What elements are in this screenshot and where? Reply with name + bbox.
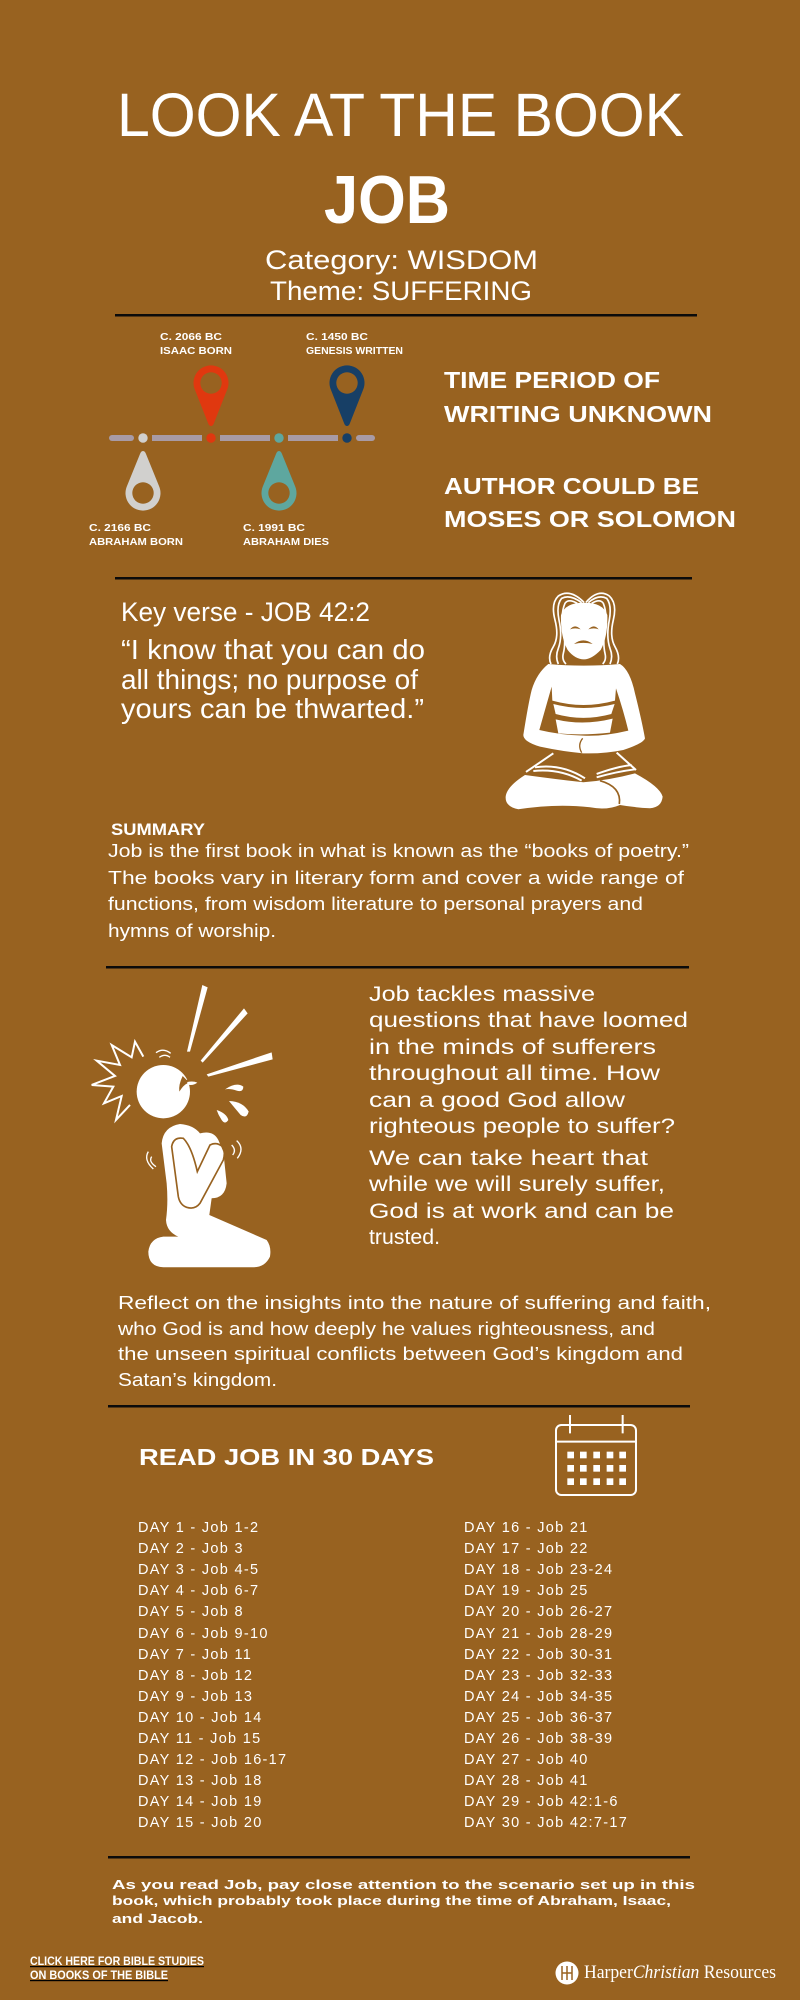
link: Bible studies [30, 1954, 204, 1982]
title: LOOK AT THE BOOK [117, 81, 684, 149]
timeline bar [109, 435, 375, 441]
reading plan: days 1 to 15: DAY 10 - Job 14 [138, 1710, 263, 1726]
reading plan: days 16 to 30: DAY 24 - Job 34-35 [464, 1689, 613, 1705]
label: Isaac born [160, 332, 232, 357]
verse text: all things; no purpose of [121, 664, 418, 695]
label: Abraham born [89, 523, 183, 548]
panel: reflection text: the unseen spiritual conflicts between God’s kingdom and [118, 1344, 683, 1364]
reading plan: days 1 to 15: DAY 4 - Job 6-7 [138, 1583, 259, 1599]
panel: massive questions text: righteous people to suffer? [369, 1115, 675, 1138]
panel: massive questions text: Job tackles massive [369, 983, 595, 1006]
marker: Genesis written [330, 365, 365, 443]
label: Abraham born: C. 2166 BC [89, 523, 151, 534]
panel: massive questions text: can a good God allow [369, 1089, 626, 1112]
icon: calendar [556, 1415, 636, 1495]
title block [117, 81, 684, 306]
panel: reflection text: Reflect on the insights into the nature of suffering and faith, [118, 1293, 711, 1313]
reading plan heading: READ JOB IN 30 DAYS [139, 1444, 434, 1470]
label: Abraham dies: C. 1991 BC [243, 523, 305, 534]
label: Abraham dies: ABRAHAM DIES [243, 537, 329, 548]
reading plan: days 16 to 30: DAY 28 - Job 41 [464, 1773, 589, 1789]
verse reference: Key verse - JOB 42:2 [121, 597, 370, 627]
panel: timeline [89, 332, 403, 548]
panel: summary [108, 820, 689, 941]
reading plan: days 16 to 30: DAY 22 - Job 30-31 [464, 1647, 613, 1663]
panel: massive questions text [368, 983, 688, 1249]
reading plan: days 1 to 15: DAY 5 - Job 8 [138, 1604, 244, 1620]
reading plan: days 1 to 15: DAY 15 - Job 20 [138, 1815, 263, 1831]
panel: time period and author: AUTHOR COULD BE [444, 473, 699, 499]
summary text: The books vary in literary form and cover a wide range of [108, 868, 685, 888]
panel: time period and author [444, 367, 736, 532]
panel: massive questions text: while we will surely suffer, [368, 1173, 665, 1196]
summary text [108, 841, 689, 941]
reading plan: days 16 to 30: DAY 23 - Job 32-33 [464, 1668, 613, 1684]
panel: massive questions text: questions that have loomed [369, 1009, 688, 1032]
panel: massive questions text: God is at work and can be [369, 1200, 674, 1223]
reading plan: days 1 to 15: DAY 12 - Job 16-17 [138, 1752, 287, 1768]
label: Genesis written: GENESIS WRITTEN [306, 346, 403, 357]
reading plan: days 16 to 30: DAY 21 - Job 28-29 [464, 1626, 613, 1642]
reading plan: days 16 to 30: DAY 30 - Job 42:7-17 [464, 1815, 628, 1831]
label: Genesis written: C. 1450 BC [306, 332, 368, 343]
icon: suffering figure crying out [92, 985, 273, 1267]
logo: HarperChristian Resources: HarperChristian Resources [584, 1962, 776, 1983]
reading plan: days 1 to 15: DAY 3 - Job 4-5 [138, 1562, 259, 1578]
theme: Theme: SUFFERING [270, 276, 532, 306]
marker: Abraham born [126, 433, 160, 511]
reading plan: days 16 to 30: DAY 17 - Job 22 [464, 1541, 589, 1557]
panel: massive questions text: We can take heart that [369, 1147, 648, 1170]
panel: time period and author: TIME PERIOD OF [444, 367, 660, 393]
reading plan: days 16 to 30: DAY 27 - Job 40 [464, 1752, 589, 1768]
closing note: book, which probably took place during the time of Abraham, Isaac, [112, 1893, 671, 1908]
label: Isaac born: ISAAC BORN [160, 346, 232, 357]
reading plan: days 1 to 15: DAY 2 - Job 3 [138, 1541, 244, 1557]
panel: massive questions text: trusted. [369, 1226, 440, 1249]
link: Bible studies: ON BOOKS OF THE BIBLE [30, 1968, 168, 1982]
label: Isaac born: C. 2066 BC [160, 332, 222, 343]
panel: reflection text: Satan’s kingdom. [118, 1370, 277, 1390]
panel: reflection text: who God is and how deeply he values righteousness, and [117, 1319, 655, 1339]
verse text: “I know that you can do [121, 634, 425, 665]
summary text: functions, from wisdom literature to personal prayers and [108, 894, 643, 914]
panel: time period and author: MOSES OR SOLOMON [444, 506, 736, 532]
label: Abraham dies [243, 523, 329, 548]
link: Bible studies: CLICK HERE FOR BIBLE STUDIES [30, 1954, 204, 1968]
reading plan: days 1 to 15: DAY 14 - Job 19 [138, 1794, 263, 1810]
reading plan: days 16 to 30: DAY 29 - Job 42:1-6 [464, 1794, 619, 1810]
label: Genesis written [306, 332, 403, 357]
reading plan: days 1 to 15: DAY 9 - Job 13 [138, 1689, 253, 1705]
verse text: yours can be thwarted.” [121, 693, 424, 724]
reading plan: days 1 to 15 [138, 1520, 287, 1831]
reading plan: days 1 to 15: DAY 1 - Job 1-2 [138, 1520, 259, 1536]
reading plan: days 16 to 30: DAY 16 - Job 21 [464, 1520, 589, 1536]
reading plan: days 16 to 30: DAY 26 - Job 38-39 [464, 1731, 613, 1747]
panel: massive questions text: throughout all time. How [369, 1062, 661, 1085]
summary text: Job is the first book in what is known as the “books of poetry.” [108, 841, 689, 861]
reading plan: days 16 to 30: DAY 19 - Job 25 [464, 1583, 589, 1599]
reading plan: days 1 to 15: DAY 13 - Job 18 [138, 1773, 263, 1789]
panel: reflection text [117, 1293, 711, 1390]
marker: Isaac born [194, 365, 228, 443]
panel: time period and author: WRITING UNKNOWN [444, 401, 712, 427]
verse text [121, 634, 425, 724]
reading plan: days 1 to 15: DAY 7 - Job 11 [138, 1647, 252, 1663]
icon: seated Job with book [506, 593, 663, 809]
label: Abraham born: ABRAHAM BORN [89, 537, 183, 548]
panel: key verse [121, 597, 425, 724]
closing note: and Jacob. [112, 1911, 203, 1926]
panel: massive questions text: in the minds of sufferers [369, 1036, 656, 1059]
reading plan: days 16 to 30: DAY 18 - Job 23-24 [464, 1562, 613, 1578]
reading plan: days 1 to 15: DAY 6 - Job 9-10 [138, 1626, 269, 1642]
summary heading: SUMMARY [111, 820, 206, 839]
summary text: hymns of worship. [108, 921, 276, 941]
reading plan: days 16 to 30: DAY 25 - Job 36-37 [464, 1710, 613, 1726]
book name: JOB [324, 162, 450, 238]
marker: Abraham dies [262, 433, 296, 511]
reading plan: days 1 to 15: DAY 8 - Job 12 [138, 1668, 253, 1684]
reading plan: days 1 to 15: DAY 11 - Job 15 [138, 1731, 261, 1747]
closing note [112, 1877, 695, 1926]
category: Category: WISDOM [265, 245, 538, 275]
reading plan: days 16 to 30 [464, 1520, 628, 1831]
reading plan: days 16 to 30: DAY 20 - Job 26-27 [464, 1604, 613, 1620]
closing note: As you read Job, pay close attention to the scenario set up in this [112, 1877, 695, 1892]
